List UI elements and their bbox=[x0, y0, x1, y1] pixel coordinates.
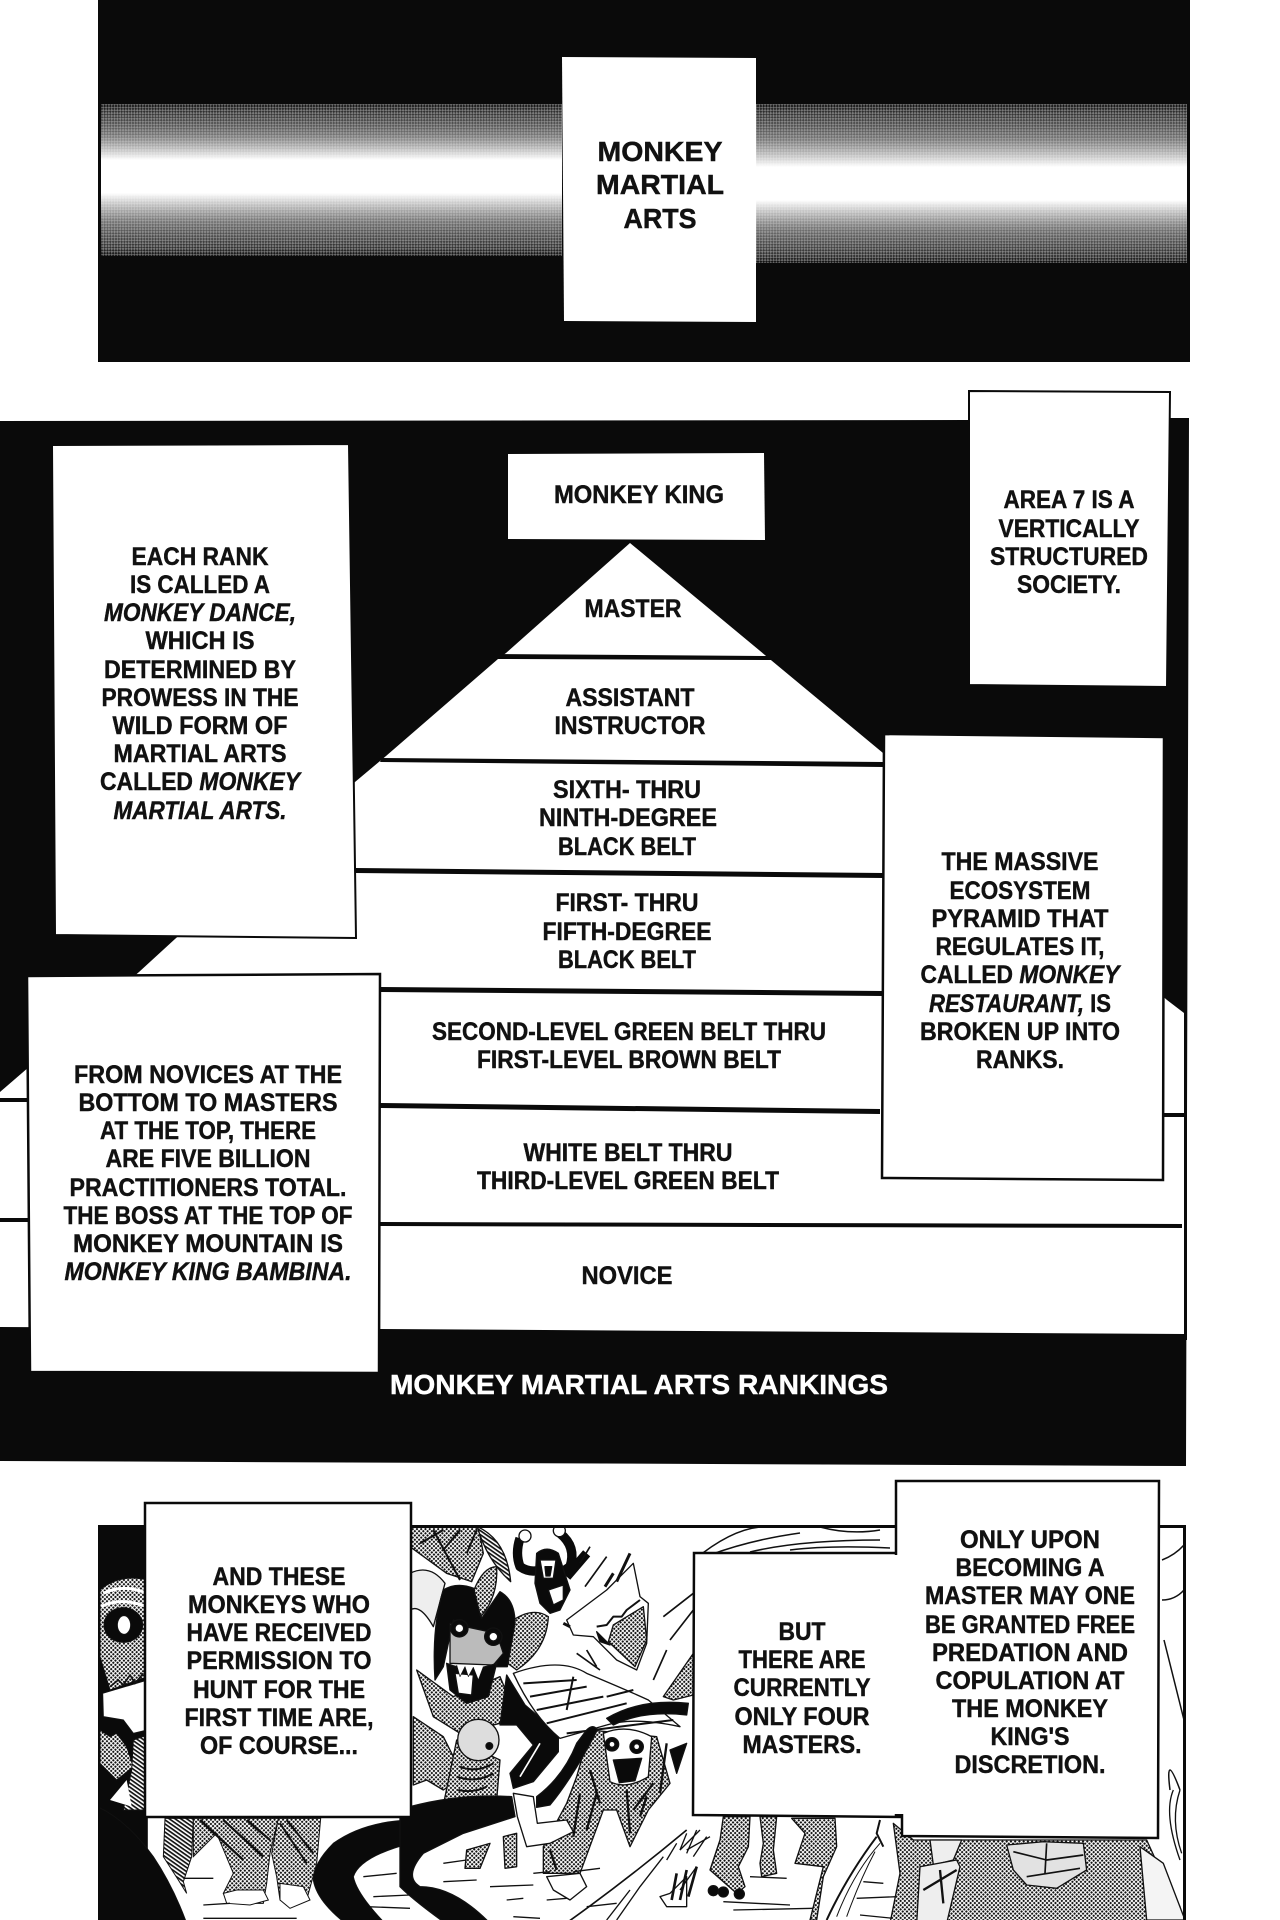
rankings panel bbox=[0, 391, 1189, 1466]
caption box: only four masters: THERE ARE bbox=[738, 1646, 866, 1674]
rank: white to green belt: THIRD-LEVEL GREEN BELT bbox=[477, 1167, 779, 1195]
caption box: and these monkeys bbox=[145, 1503, 411, 1817]
rank: assistant instructor bbox=[554, 684, 706, 740]
caption box: and these monkeys: HUNT FOR THE bbox=[193, 1676, 365, 1704]
callout: five billion practitioners bbox=[27, 974, 380, 1373]
rank: monkey king box: MONKEY KING bbox=[554, 481, 724, 509]
callout: five billion practitioners: ARE FIVE BILLION bbox=[106, 1145, 310, 1173]
rank: master: MASTER bbox=[584, 595, 682, 623]
callout: area 7 bbox=[969, 391, 1170, 687]
callout: ecosystem pyramid: RANKS. bbox=[976, 1046, 1064, 1074]
caption box: and these monkeys: AND THESE bbox=[212, 1563, 346, 1591]
callout: each rank: DETERMINED BY bbox=[104, 656, 296, 684]
screaming monkey bbox=[537, 1727, 687, 1873]
callout: each rank bbox=[52, 444, 356, 938]
caption box: only four masters: CURRENTLY bbox=[734, 1674, 871, 1702]
monkey legs and hands bbox=[400, 1793, 707, 1920]
central monkey and companions bbox=[400, 1525, 707, 1920]
callout: each rank: EACH RANK bbox=[132, 543, 268, 571]
rank: first to fifth degree: FIFTH-DEGREE bbox=[542, 918, 712, 946]
callout: ecosystem pyramid: RESTAURANT, IS bbox=[929, 990, 1111, 1018]
rank: green to brown belt: SECOND-LEVEL GREEN BELT THRU bbox=[432, 1018, 826, 1046]
callout: five billion practitioners: AT THE TOP, THERE bbox=[100, 1117, 316, 1145]
hair lines along the top bbox=[694, 1527, 1184, 1790]
caption box: only upon becoming a master: ONLY UPON bbox=[960, 1526, 1100, 1554]
rank: sixth to ninth degree: BLACK BELT bbox=[558, 833, 696, 861]
rank: green to brown belt: FIRST-LEVEL BROWN BELT bbox=[477, 1046, 781, 1074]
rank: novice: NOVICE bbox=[582, 1262, 672, 1290]
callout: ecosystem pyramid: ECOSYSTEM bbox=[950, 877, 1090, 905]
callout: ecosystem pyramid: CALLED MONKEY bbox=[920, 961, 1122, 989]
rank: white to green belt bbox=[477, 1139, 779, 1195]
callout: area 7: VERTICALLY bbox=[998, 515, 1140, 543]
rank: monkey king box bbox=[508, 453, 765, 540]
rank: first to fifth degree: BLACK BELT bbox=[558, 946, 696, 974]
callout: ecosystem pyramid: PYRAMID THAT bbox=[932, 905, 1108, 933]
callout: area 7: SOCIETY. bbox=[1017, 571, 1121, 599]
caption box: only four masters bbox=[693, 1553, 905, 1817]
callout: each rank: MONKEY DANCE, bbox=[104, 599, 296, 627]
wolf head bbox=[563, 1547, 693, 1680]
callout: each rank: WILD FORM OF bbox=[112, 712, 288, 740]
rank: white to green belt: WHITE BELT THRU bbox=[524, 1139, 732, 1167]
caption box: only upon becoming a master: MASTER MAY ONE bbox=[925, 1582, 1135, 1610]
callout: ecosystem pyramid: THE MASSIVE bbox=[942, 848, 1098, 876]
callout: area 7: AREA 7 IS A bbox=[1004, 486, 1134, 514]
small monkey arms up bbox=[517, 1525, 587, 1613]
caption box: only four masters: MASTERS. bbox=[742, 1731, 862, 1759]
caption box: only four masters: BUT bbox=[778, 1618, 826, 1646]
wolf fur shading bbox=[663, 1653, 693, 1700]
rank: first to fifth degree bbox=[542, 889, 712, 974]
caption box: only upon becoming a master: PREDATION AND bbox=[932, 1639, 1128, 1667]
wing bbox=[513, 1665, 688, 1738]
callout: ecosystem pyramid: BROKEN UP INTO bbox=[920, 1018, 1120, 1046]
callout: each rank: IS CALLED A bbox=[130, 571, 270, 599]
rank: assistant instructor: INSTRUCTOR bbox=[554, 712, 706, 740]
callout: five billion practitioners: THE BOSS AT THE TOP OF bbox=[64, 1202, 352, 1230]
callout: each rank: PROWESS IN THE bbox=[102, 684, 298, 712]
title banner bbox=[98, 0, 1190, 362]
callout: area 7: STRUCTURED bbox=[990, 543, 1148, 571]
caption box: only upon becoming a master: KING'S bbox=[990, 1723, 1070, 1751]
legs under the left box bbox=[163, 1818, 410, 1920]
title box: MARTIAL bbox=[596, 169, 724, 200]
callout: five billion practitioners: PRACTITIONERS TOTAL. bbox=[70, 1174, 346, 1202]
caption box: and these monkeys: OF COURSE... bbox=[200, 1732, 358, 1760]
rank: first to fifth degree: FIRST- THRU bbox=[556, 889, 698, 917]
main monkey bbox=[413, 1567, 558, 1805]
callout: five billion practitioners: BOTTOM TO MASTERS bbox=[78, 1089, 338, 1117]
creature at left edge bbox=[97, 1523, 187, 1920]
caption box: and these monkeys: PERMISSION TO bbox=[186, 1647, 372, 1675]
manga panel: monkeys illustration bbox=[97, 1523, 1187, 1920]
callout: five billion practitioners: FROM NOVICES AT THE bbox=[74, 1061, 342, 1089]
caption box: and these monkeys: HAVE RECEIVED bbox=[186, 1619, 372, 1647]
pyramid caption: MONKEY MARTIAL ARTS RANKINGS bbox=[390, 1369, 888, 1400]
pyramid of ranks bbox=[0, 543, 1187, 1340]
caption box: and these monkeys: MONKEYS WHO bbox=[188, 1591, 370, 1619]
rank: sixth to ninth degree bbox=[539, 776, 717, 861]
rank: sixth to ninth degree: NINTH-DEGREE bbox=[539, 804, 717, 832]
callout: ecosystem pyramid: REGULATES IT, bbox=[936, 933, 1104, 961]
caption box: only four masters: ONLY FOUR bbox=[734, 1703, 870, 1731]
caption box: only upon becoming a master: COPULATION AT bbox=[936, 1667, 1124, 1695]
callout: each rank: MARTIAL ARTS bbox=[114, 740, 286, 768]
callout: ecosystem pyramid bbox=[882, 734, 1164, 1180]
rank: sixth to ninth degree: SIXTH- THRU bbox=[553, 776, 701, 804]
callout: five billion practitioners: MONKEY KING BAMBINA. bbox=[64, 1258, 352, 1286]
rank: assistant instructor: ASSISTANT bbox=[566, 684, 694, 712]
callout: each rank: WHICH IS bbox=[146, 627, 254, 655]
caption box: only upon becoming a master bbox=[890, 1481, 1159, 1838]
title box: MONKEY bbox=[598, 136, 723, 167]
caption box: only upon becoming a master: BE GRANTED FREE bbox=[925, 1611, 1135, 1639]
panel border bbox=[412, 1525, 1186, 1920]
caption box: only upon becoming a master: DISCRETION. bbox=[954, 1751, 1106, 1779]
lower right creatures bbox=[680, 1790, 1185, 1920]
caption box: only upon becoming a master: THE MONKEY bbox=[952, 1695, 1108, 1723]
title box bbox=[562, 57, 756, 322]
caption box: only upon becoming a master: BECOMING A bbox=[956, 1554, 1104, 1582]
rank: green to brown belt bbox=[432, 1018, 826, 1074]
callout: each rank: MARTIAL ARTS. bbox=[114, 797, 286, 825]
callout: each rank: CALLED MONKEY bbox=[100, 768, 302, 796]
callout: five billion practitioners: MONKEY MOUNTAIN IS bbox=[73, 1230, 343, 1258]
caption box: and these monkeys: FIRST TIME ARE, bbox=[184, 1704, 374, 1732]
title box: ARTS bbox=[624, 203, 696, 234]
